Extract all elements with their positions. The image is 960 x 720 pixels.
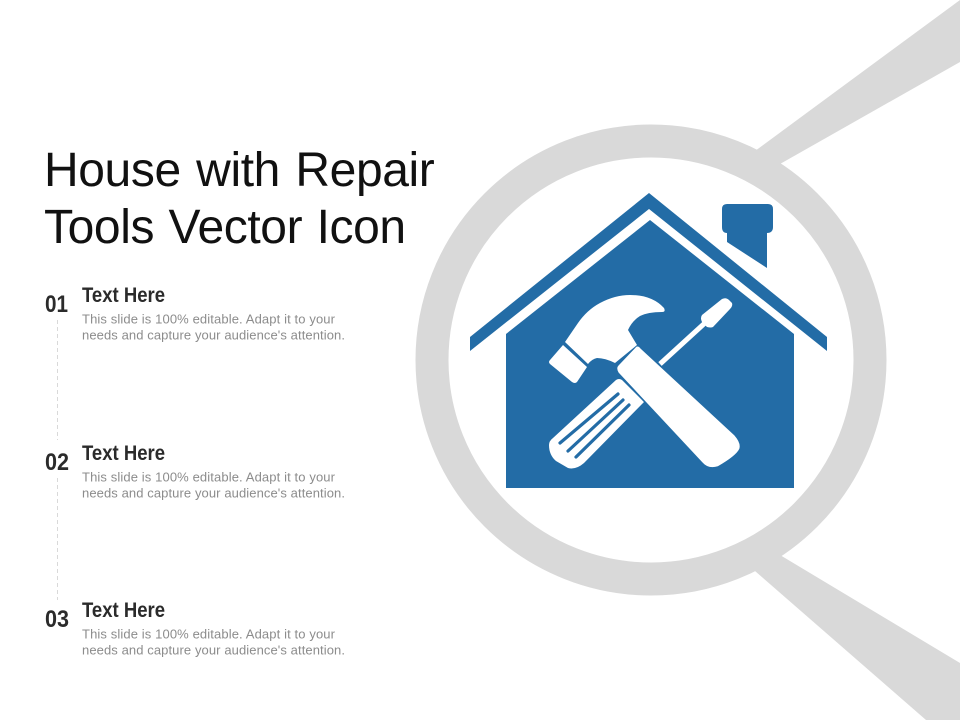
number 02: 02 (45, 449, 69, 476)
heading 02: Text Here (82, 442, 165, 465)
magnifier handle top (755, 0, 960, 164)
description 02: needs and capture your audience's attention. (82, 486, 345, 500)
roof (470, 193, 827, 351)
magnifier ring (432, 141, 870, 579)
description 03: This slide is 100% editable. Adapt it to your (82, 626, 336, 642)
hammer head (565, 295, 665, 364)
screwdriver handle (549, 379, 644, 468)
hammer handle (616, 346, 740, 468)
description 03 (82, 626, 345, 658)
timeline connector 1 (56, 320, 58, 440)
description 02 (82, 470, 345, 500)
screwdriver tip (701, 298, 732, 328)
heading 01: Text Here (82, 284, 165, 307)
house with tools icon (470, 193, 827, 488)
item 01 (45, 284, 345, 342)
screwdriver (549, 298, 732, 468)
house body (506, 220, 794, 488)
magnifier icon (432, 0, 960, 720)
heading 03: Text Here (82, 599, 165, 622)
description 01: This slide is 100% editable. Adapt it to your (82, 312, 336, 326)
title: House with Repair (44, 144, 435, 197)
number 03: 03 (45, 606, 69, 633)
description 01 (82, 312, 345, 342)
hammer (549, 295, 740, 468)
timeline connector 2 (56, 478, 58, 600)
title (44, 144, 435, 254)
description 03: needs and capture your audience's attention. (82, 642, 345, 658)
magnifier handle bottom (755, 555, 960, 720)
number 01: 01 (45, 291, 68, 318)
description 02: This slide is 100% editable. Adapt it to your (82, 470, 336, 484)
chimney (722, 204, 773, 268)
hammer poll (549, 345, 587, 383)
screwdriver grooves (560, 394, 629, 457)
description 01: needs and capture your audience's attention. (82, 328, 345, 342)
item 02 (45, 442, 345, 500)
title: Tools Vector Icon (44, 201, 406, 254)
item 03 (45, 599, 345, 658)
screwdriver shaft (660, 322, 706, 364)
